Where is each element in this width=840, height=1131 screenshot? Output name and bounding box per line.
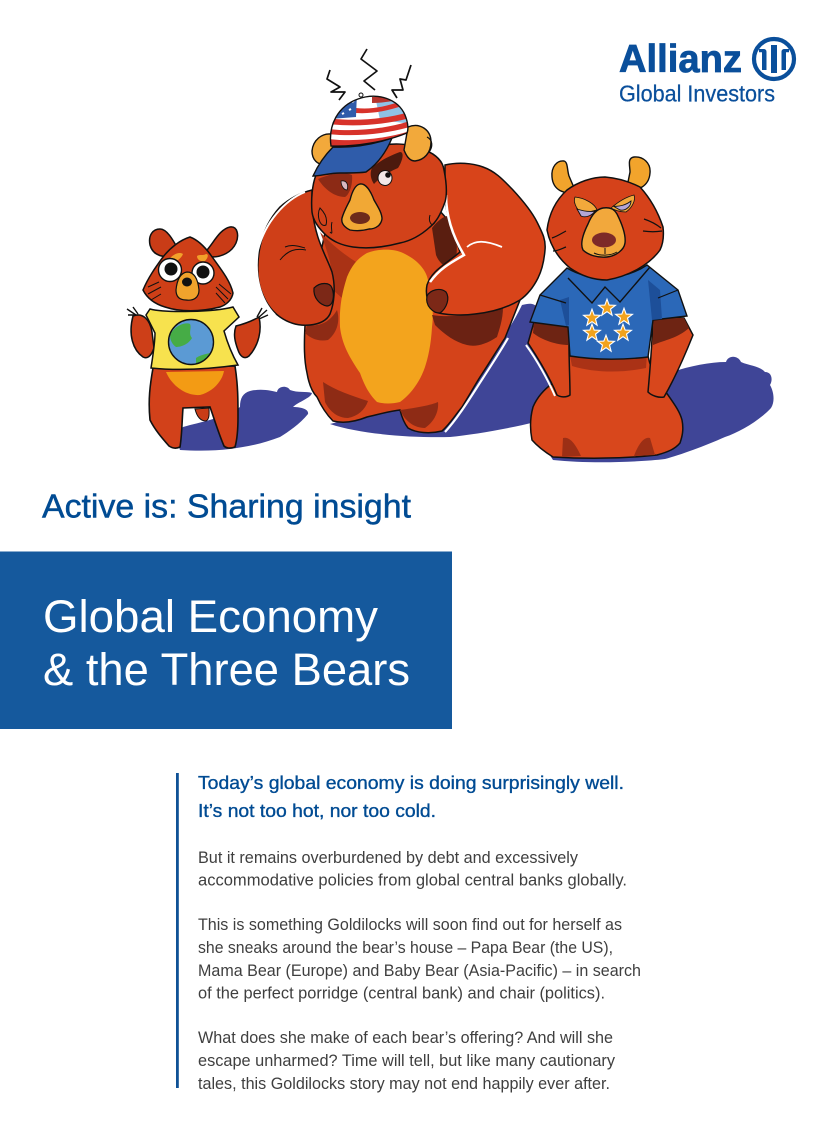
title text (43, 591, 410, 695)
papa bear: cap dome with stars and stripes (328, 92, 412, 146)
papa bear: right arm highlight (430, 195, 464, 282)
mama bear: body (531, 356, 683, 458)
baby bear: head (143, 237, 233, 311)
papa bear: lower right edge highlight (445, 338, 508, 432)
papa bear: right ear (404, 125, 431, 161)
body paragraph 1: But it remains overburdened by debt and excessively (198, 849, 579, 867)
body paragraph 3: What does she make of each bear’s offering? And will she (198, 1029, 613, 1047)
mama bear: left ear (552, 161, 575, 192)
baby bear: right ear (207, 227, 238, 257)
papa bear: body (304, 200, 520, 433)
baby bear: left paw claws (127, 307, 138, 315)
body paragraph 1: accommodative policies from global central banks globally. (198, 872, 627, 890)
baby bear: globe (168, 320, 214, 366)
papa bear: arm fur (467, 242, 502, 247)
baby bear: muzzle (176, 272, 199, 300)
papa bear: shoulder shading (320, 232, 356, 298)
mama bear: shirt (530, 265, 687, 359)
baby bear: nose (182, 278, 192, 286)
title background (0, 552, 452, 729)
logo subtitle: Global Investors (619, 80, 775, 106)
illustration: three bears (127, 49, 774, 462)
papa bear: right eye pupil (385, 172, 391, 178)
baby bear: left arm (131, 315, 154, 358)
papa bear: left arm outline highlight (257, 192, 305, 315)
baby bear: cheek fur (148, 282, 231, 303)
mama bear: head (547, 177, 663, 280)
papa bear: belly (340, 250, 433, 404)
papa bear: arm shadow under left arm (305, 310, 338, 341)
papa bear: right ear rim (427, 137, 432, 152)
body paragraph 2: she sneaks around the bear’s house – Papa Bear (the US), (198, 939, 613, 957)
mama bear (526, 157, 693, 458)
shadow: mama bear (540, 357, 774, 462)
papa bear: left eye (341, 181, 348, 190)
baby bear: shirt (146, 307, 239, 369)
mama bear: sleeve cuffs (540, 290, 678, 303)
anger squiggles (327, 49, 411, 100)
shadow: baby bear (178, 387, 312, 451)
mama bear: eyes (577, 201, 631, 217)
logo: Allianz Global Investors (619, 38, 794, 106)
mama bear: right arm (648, 318, 693, 397)
body paragraph 3 (198, 1029, 616, 1093)
mama bear: brow patches (574, 195, 635, 214)
baby bear: right arm (235, 317, 260, 358)
lead paragraph: Today’s global economy is doing surprisingly well. (198, 772, 624, 793)
mama bear: collar (568, 267, 650, 303)
papa bear: left fist (314, 284, 333, 306)
papa bear: foot shadows (323, 382, 438, 428)
baby bear (127, 227, 268, 448)
body paragraph 3: tales, this Goldilocks story may not end happily ever after. (198, 1075, 610, 1093)
mama bear: EU stars (585, 301, 631, 350)
papa bear: left arm fur (280, 245, 306, 260)
title text: & the Three Bears (43, 644, 410, 695)
papa bear: cap visor (313, 138, 392, 176)
mama bear: feet shadows (562, 438, 655, 457)
baby bear: brows (170, 253, 208, 263)
baby bear: legs and body (149, 366, 238, 448)
mama bear: left arm edge highlight (526, 345, 555, 396)
logo wordmark: Allianz (619, 38, 742, 81)
body paragraph 3: escape unharmed? Time will tell, but like many cautionary (198, 1052, 616, 1070)
body paragraph 2: This is something Goldilocks will soon find out for herself as (198, 916, 622, 934)
papa bear: left eye patch (318, 173, 352, 197)
baby bear: tail (195, 408, 209, 421)
mama bear: whiskers (552, 219, 662, 251)
mama bear: left arm (528, 322, 570, 397)
papa bear: nose (350, 212, 370, 224)
papa bear: left ear (312, 134, 334, 164)
baby bear: eyes (158, 258, 214, 284)
mama bear: hem shadow (570, 355, 647, 372)
papa bear: right arm band shadow (432, 307, 503, 346)
vertical rule (176, 773, 179, 1088)
shadow: papa bear (330, 304, 560, 437)
mama bear: right ear (627, 157, 650, 189)
mama bear: nose (592, 232, 616, 248)
lead paragraph: It’s not too hot, nor too cold. (198, 800, 436, 821)
papa bear: right fist (427, 289, 448, 313)
title panel (0, 552, 452, 729)
papa bear: head (312, 144, 446, 248)
mama bear: muzzle (582, 208, 625, 257)
lead paragraph (198, 772, 624, 821)
subheading: Active is: Sharing insight: Active is: Sharing insight (42, 488, 411, 524)
papa bear: jaw fur (318, 208, 435, 233)
body paragraph 2: Mama Bear (Europe) and Baby Bear (Asia-Pacific) – in search (198, 962, 641, 980)
baby bear: tummy (166, 371, 224, 395)
mama bear: right arm shadow (653, 318, 689, 345)
baby bear: left ear (150, 229, 178, 256)
mama bear: left arm shadow (533, 322, 569, 345)
baby bear: right paw claws (257, 308, 268, 319)
papa bear: muzzle (342, 184, 382, 231)
mama bear: mouth (594, 248, 617, 255)
body paragraph 1 (198, 849, 627, 890)
papa bear: right brow (371, 152, 403, 184)
papa bear: dark shadow behind right arm (432, 216, 457, 267)
title text: Global Economy (43, 591, 378, 642)
papa bear: right eye (378, 170, 392, 186)
papa bear: right arm (426, 163, 545, 315)
text block: introduction (176, 772, 641, 1093)
mama bear: sleeve shadow (560, 280, 662, 326)
logo emblem (754, 39, 794, 79)
body paragraph 2: of the perfect porridge (central bank) and chair (politics). (198, 984, 605, 1002)
papa bear (257, 49, 545, 433)
papa bear: left arm (258, 190, 334, 325)
body paragraph 2 (198, 916, 641, 1002)
